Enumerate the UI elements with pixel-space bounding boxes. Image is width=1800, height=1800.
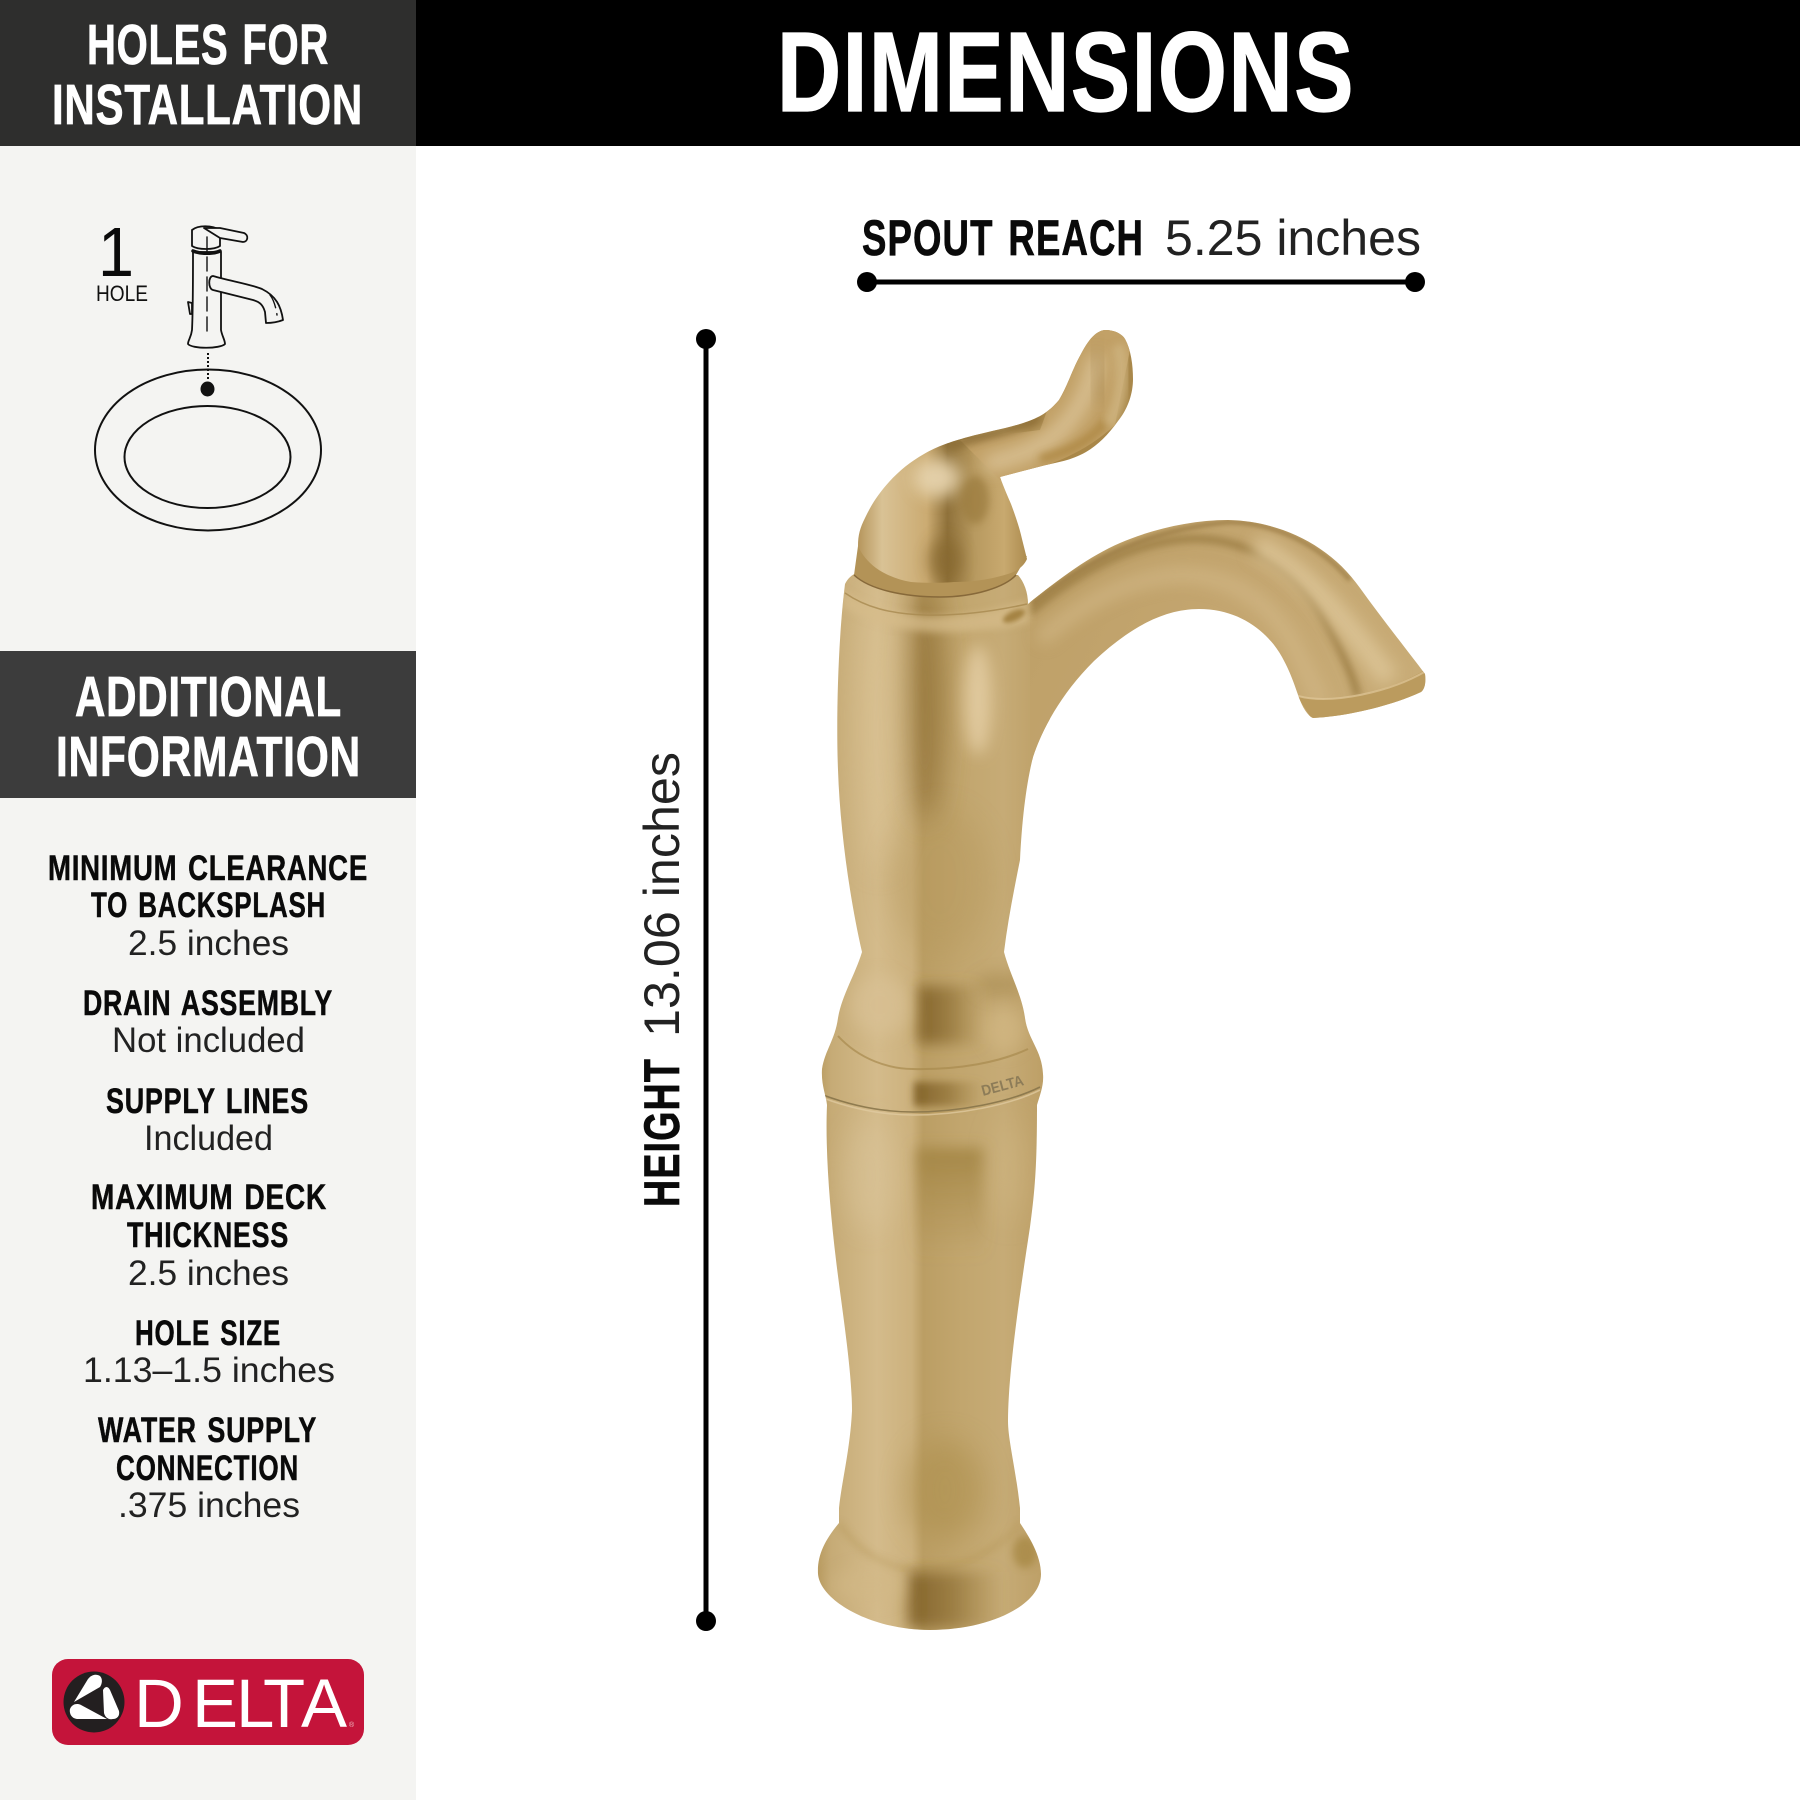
hole label: HOLE (96, 281, 148, 306)
collar lip (842, 598, 1032, 636)
dotted connector (207, 353, 209, 381)
sink basin (124, 406, 290, 508)
lower body shading (916, 1148, 984, 1258)
wordmark: DELTA (134, 1665, 347, 1742)
height measure line (696, 329, 716, 1631)
spec: water supply connection (98, 1411, 317, 1525)
header: additional information (0, 651, 416, 798)
faucet body and spout (810, 490, 1450, 1640)
spout reach measure line (857, 272, 1425, 292)
base flange shading (839, 1523, 1020, 1569)
handle and cap (858, 330, 1133, 583)
engraved brand mark: DELTA (980, 1072, 1026, 1100)
spec: drain assembly: DRAIN ASSEMBLY (83, 984, 333, 1023)
header: dimensions banner (416, 0, 1800, 146)
logo: delta (52, 1659, 364, 1745)
spec: hole size (83, 1314, 335, 1390)
spec: minimum clearance: MINIMUM CLEARANCE (48, 849, 368, 888)
spec: water supply connection: WATER SUPPLY (98, 1411, 317, 1450)
spec: water supply connection: .375 inches (118, 1486, 300, 1525)
spec: minimum clearance: 2.5 inches (128, 924, 289, 963)
waist and ring shading (918, 986, 984, 1044)
diagram: one hole installation (95, 213, 321, 530)
spec: maximum deck thickness: THICKNESS (127, 1216, 289, 1255)
height label: HEIGHT (634, 1058, 690, 1207)
heading line two: INFORMATION (56, 725, 361, 789)
heading line two: INSTALLATION (52, 73, 363, 137)
height value: 13.06 inches (634, 752, 690, 1037)
spec: maximum deck thickness (91, 1178, 327, 1293)
spec: supply lines (106, 1082, 309, 1158)
title: dimensions: DIMENSIONS (777, 9, 1355, 135)
spec: supply lines: SUPPLY LINES (106, 1082, 309, 1121)
product photo: gold faucet (810, 300, 1450, 1640)
panel: left sidebar (0, 146, 416, 1800)
spec: minimum clearance (48, 849, 368, 963)
icon: delta emblem (64, 1672, 124, 1732)
spec: water supply connection: CONNECTION (116, 1449, 299, 1488)
spec: hole size: HOLE SIZE (135, 1314, 281, 1353)
collar groove (854, 546, 1027, 597)
spec: hole size: 1.13–1.5 inches (83, 1351, 335, 1390)
faucet hole (200, 382, 214, 396)
dimension: spout reach (857, 210, 1425, 292)
header: holes for installation (0, 0, 416, 146)
registered mark: ® (349, 1721, 355, 1729)
dimension: height (634, 329, 716, 1631)
heading line one: ADDITIONAL (75, 665, 342, 729)
spout reach label: SPOUT REACH (862, 210, 1144, 266)
spec: maximum deck thickness: 2.5 inches (128, 1254, 289, 1293)
spec: supply lines: Included (144, 1119, 273, 1158)
spout reach value: 5.25 inches (1165, 210, 1421, 266)
spec: drain assembly: Not included (112, 1021, 305, 1060)
heading line one: HOLES FOR (87, 13, 329, 77)
spec: maximum deck thickness: MAXIMUM DECK (91, 1178, 327, 1217)
body shading (907, 575, 943, 825)
spec: drain assembly (83, 984, 333, 1060)
spec: minimum clearance: TO BACKSPLASH (91, 886, 326, 925)
icon: faucet line drawing (188, 226, 283, 348)
sink outer rim (95, 370, 321, 530)
hole count number: 1 (98, 213, 134, 291)
spout tip (1298, 671, 1426, 718)
